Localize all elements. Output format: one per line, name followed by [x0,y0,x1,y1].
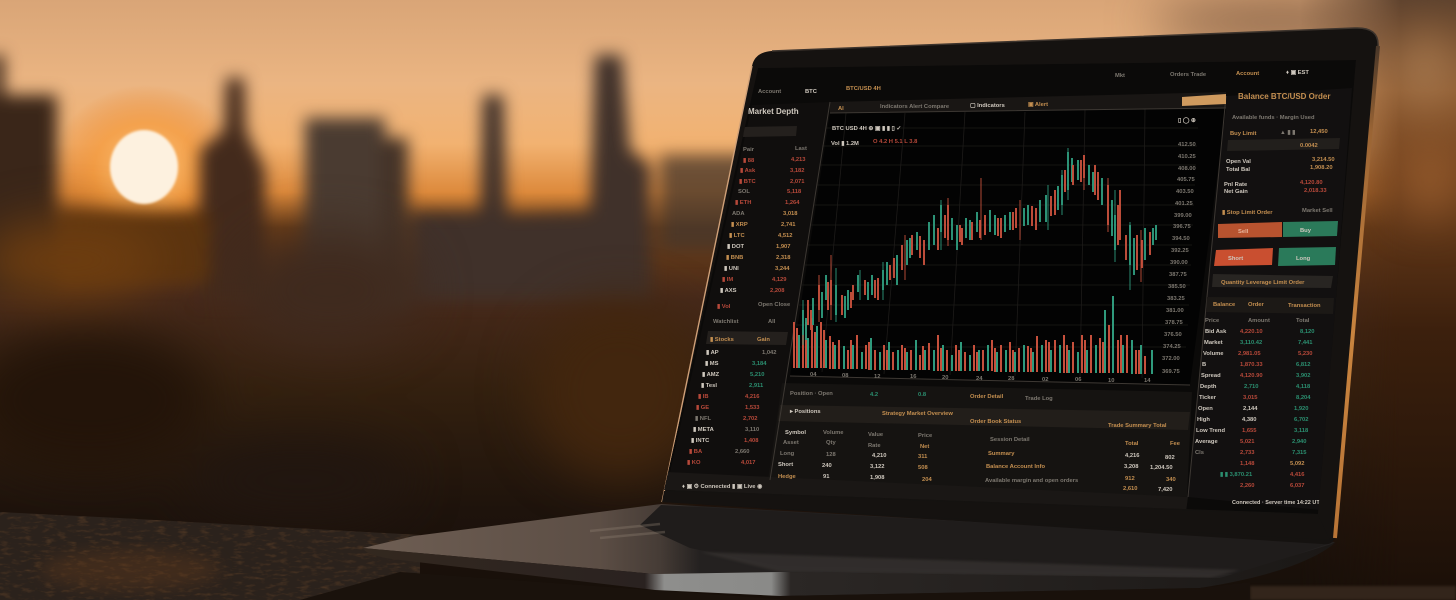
bottom table text: 2,610 [1123,486,1138,492]
left second list rows: 1,533 [745,405,760,411]
left watchlist rows: 3,018 [783,211,798,217]
y axis labels: 374.25 [1163,344,1182,350]
order book rows: 8,204 [1296,395,1311,401]
bottom table text: Net [920,444,929,450]
top bar text: ♦ ▣ EST [1286,70,1309,76]
right panel fields: 4,120.80 [1300,180,1323,186]
bottom table text: 91 [823,474,830,480]
left watchlist rows: 2,071 [790,179,805,185]
left watchlist rows: Last [795,146,807,152]
order book rows: 5,021 [1240,439,1255,445]
left watchlist rows: ▮ BNB [726,255,743,261]
left watchlist rows: 4,129 [772,277,787,283]
left panel heading: Market Depth [748,107,799,116]
left second list rows: Gain [757,337,770,343]
bottom toolbar text: ▸ Positions [789,409,821,415]
left second list rows [687,337,777,466]
order book rows: 1,920 [1294,406,1309,412]
left watchlist rows: Watchlist [713,319,739,325]
order book rows: 3,118 [1294,428,1309,434]
left watchlist rows: ▮ ETH [735,200,751,206]
left watchlist rows: ▮ UNI [724,266,739,272]
bottom table text: 340 [1166,477,1176,483]
order book rows: Amount [1248,318,1270,324]
orange action button [1182,94,1226,106]
chart: green candles [803,152,1156,340]
buy button small [1283,221,1338,237]
order book rows: 2,981.05 [1238,351,1261,357]
left second list rows: 2,702 [743,416,758,422]
chart toolbar text: Al [838,106,844,112]
chart toolbar text: BTC USD 4H ⊕ ▣ ▮ ▮ ▯ ✓ [832,126,901,132]
bottom table text: 7,420 [1158,487,1173,493]
bottom table text: Summary [988,451,1015,457]
order book rows: 4,220.10 [1240,329,1263,335]
order book rows: 1,655 [1242,428,1257,434]
order book header: Balance [1213,302,1236,308]
left watchlist rows: 1,907 [776,244,791,250]
order book rows: Average [1195,439,1218,445]
order input text: Quantity Leverage Limit Order [1221,280,1305,286]
chart: candle wicks [803,148,1141,345]
order book rows: 3,902 [1296,373,1311,379]
bottom table text: 3,208 [1124,464,1139,470]
left watchlist rows: All [768,319,776,325]
order book rows [1195,318,1324,506]
lid right edge highlight [1335,46,1378,538]
chart header bar [830,92,1226,113]
order book header: Order [1248,302,1265,308]
bottom table text: Price [918,433,933,439]
left watchlist rows: ▮ 88 [743,158,755,164]
x axis labels: 20 [942,375,948,381]
right panel fields: Net Gain [1224,189,1248,195]
sell button small [1218,222,1282,238]
left watchlist rows: ▮ BTC [739,179,757,185]
x axis labels: 10 [1108,378,1114,384]
y axis labels: 399.00 [1174,213,1192,219]
order book rows: 4,416 [1290,472,1305,478]
left watchlist rows: 3,182 [790,168,805,174]
chart toolbar text: ▯ ◯ ⊕ [1178,117,1196,124]
table lower shadow [300,572,790,600]
x axis labels: 04 [810,372,817,378]
bottom table text: 311 [918,454,928,460]
bottom table text: 1,908 [870,475,885,481]
background: tree highlights [1150,8,1456,216]
y axis labels: 410.25 [1178,154,1197,160]
bottom toolbar text: Order Book Status [970,419,1021,425]
order book rows: Low Trend [1196,428,1225,434]
keyboard front highlight [700,552,1240,578]
bottom table text: 508 [918,465,928,471]
left second list rows: ▮ Tesl [701,383,717,389]
bottom table text: 4,210 [872,453,887,459]
order book rows: Ticker [1199,395,1217,401]
bottom table text: 128 [826,452,836,458]
order book rows: 2,733 [1240,450,1255,456]
top bar text: BTC/USD 4H [846,86,881,92]
chart: red candles [808,155,1150,330]
order book rows: 1,870.33 [1240,362,1263,368]
buy button large [1278,247,1336,266]
bottom table text: 4,216 [1125,453,1140,459]
left watchlist rows [713,146,807,325]
x axis labels: 06 [1075,377,1082,383]
laptop lid [662,28,1378,544]
bottom panel [768,383,1192,497]
bottom panel strip [778,405,1190,430]
left watchlist rows: 2,318 [776,255,791,261]
background: sun glow [51,85,241,255]
bottom table text: Balance Account Info [986,464,1046,470]
x axis labels: 02 [1042,377,1048,383]
bottom table text: 912 [1125,476,1135,482]
left second list rows: ▮ KO [687,460,701,466]
left watchlist rows: 2,741 [781,222,796,228]
bottom table text: Volume [823,430,844,436]
right panel fields [1222,115,1340,216]
sell button large [1214,248,1273,266]
bottom toolbar text: Strategy Market Overview [882,411,953,417]
order book rows: 6,812 [1296,362,1311,368]
right panel fields: 3,214.50 [1312,157,1335,163]
order book rows: 7,315 [1292,450,1307,456]
chart toolbar text: O 4.2 H 5.1 L 3.8 [873,139,918,145]
left watchlist rows: 2,208 [770,288,785,294]
order book rows: ▮ ▮ 3,870.21 [1220,472,1253,478]
bottom table text: Short [778,462,793,468]
left second list rows: ▮ NFL [695,416,712,422]
bottom table text: Available margin and open orders [985,478,1078,484]
keyboard reflections [590,524,665,538]
order book rows: 3,110.42 [1240,340,1262,346]
order input bar [1212,274,1333,288]
order book rows: 2,144 [1243,406,1258,412]
right panel fields: 0.0042 [1300,143,1318,149]
left second list rows: ▮ BA [689,449,703,455]
order book rows: 2,710 [1244,384,1259,390]
bottom table text: Session Detail [990,437,1030,443]
left watchlist rows: 4,512 [778,233,793,239]
top bar text: Mkt [1115,73,1125,79]
top bar text: Account [1236,71,1259,77]
button labels: Sell [1238,229,1249,235]
right panel fields: Market Sell [1302,208,1333,214]
left second list rows: 3,110 [745,427,759,433]
left second list rows: 5,210 [750,372,765,378]
y axis labels: 403.50 [1176,189,1194,195]
order book rows: 6,037 [1290,483,1305,489]
right panel heading: Balance BTC/USD Order [1238,92,1330,101]
right panel fields: 12,450 [1310,129,1328,135]
right panel fields: 2,018.33 [1304,188,1327,194]
order book rows: 1,148 [1240,461,1255,467]
screen base [664,60,1356,514]
left second list rows: ▮ META [693,427,715,433]
lid top edge highlight [772,28,1378,51]
chart toolbar text: ▢ Indicators [970,103,1005,109]
x axis labels: 16 [910,374,917,380]
order book rows: 3,015 [1243,395,1258,401]
right panel fields: ▮ Stop Limit Order [1222,210,1273,216]
left watchlist rows: Open Close [758,302,791,308]
order book rows: Market [1204,340,1223,346]
left watchlist rows: 4,213 [791,157,806,163]
x axis labels: 14 [1144,378,1151,384]
bottom table text: Fee [1170,441,1181,447]
bottom table text: Qty [826,440,836,446]
right panel fields: 1,908.20 [1310,165,1333,171]
order book rows: 7,441 [1298,340,1313,346]
background: lower blurred bokeh shapes [0,220,710,520]
y axis labels: 390.00 [1170,260,1188,266]
chart toolbar text: ▣ Alert [1028,102,1048,108]
bottom toolbar text: Position · Open [790,391,833,397]
top bar text [758,70,1309,95]
grid lines [793,109,1198,378]
order book rows: Depth [1200,384,1217,390]
right panel fields: ▲ ▮ ▮ [1280,130,1295,136]
screen [664,60,1356,514]
left watchlist rows: 5,118 [787,189,802,195]
y axis labels: 394.50 [1172,236,1190,242]
order book rows: Open [1198,406,1213,412]
bottom toolbar text: 0.8 [918,392,927,398]
left second list rows: ▮ AP [706,350,719,356]
status bar text: ♦ ▣ ⚙ Connected ▮ ▣ Live ◉ [682,483,763,490]
x axis labels: 24 [976,376,983,382]
order book rows: Bid Ask [1205,329,1227,335]
order book rows: Volume [1203,351,1224,357]
left watchlist rows: ▮ AXS [720,288,737,294]
chart toolbar text [831,102,1196,147]
left second list rows: 2,911 [749,383,764,389]
laptop base deck [363,504,1335,578]
left second list rows: 1,408 [744,438,759,444]
keyboard shadow area [640,505,1333,574]
left second list rows: 3,184 [752,361,767,367]
left watchlist rows: ▮ LTC [729,233,745,239]
bottom toolbar text: 4.2 [870,392,878,398]
bottom toolbar text [789,391,1167,429]
order book rows: 8,120 [1300,329,1315,335]
left watchlist panel [670,102,830,480]
order book rows: Price [1205,318,1220,324]
panel dividers [770,96,1226,497]
order book header [1206,297,1334,314]
x axis labels: 28 [1008,376,1015,382]
y axis labels: 396.75 [1173,224,1192,230]
left second list rows: 4,216 [745,394,760,400]
table surface [0,505,430,600]
left watchlist rows: ▮ XRP [731,222,748,228]
bottom table text: Total [1125,441,1139,447]
y axis labels: 369.75 [1162,369,1181,375]
right panel fields: Available funds · Margin Used [1232,115,1315,121]
bezel bottom [662,491,1330,540]
bottom table text: Value [868,432,884,438]
bottom table text: 204 [922,477,932,483]
bottom table text: Hedge [778,474,796,480]
y axis labels: 408.00 [1178,166,1196,172]
order book rows: 6,702 [1294,417,1309,423]
y axis labels [1162,142,1197,375]
left second list rows: ▮ AMZ [702,372,720,378]
laptop front lip [363,543,1335,596]
foreground bottom shadow [780,582,1250,600]
button labels [1228,228,1312,262]
status bar [664,472,1188,512]
order book rows: High [1197,417,1210,423]
y axis labels: 392.25 [1171,248,1190,254]
order book rows: Cls [1195,450,1204,456]
left watchlist rows: 3,244 [775,266,790,272]
order book header: Transaction [1288,303,1321,309]
y axis labels: 372.00 [1162,356,1180,362]
left watchlist rows: ▮ IM [722,277,733,283]
chart toolbar text: Vol ▮ 1.2M [831,141,859,147]
bottom table text: 240 [822,463,832,469]
bottom table text: Rate [868,443,881,449]
bottom toolbar text: Trade Summary Total [1108,423,1167,429]
top bar text: Account [758,89,781,95]
lid left edge highlight [662,66,752,502]
laptop [363,28,1378,596]
top bar text: Orders Trade [1170,72,1207,78]
sun [110,130,178,204]
button labels: Long [1296,256,1311,262]
y axis labels: 381.00 [1166,308,1184,314]
left second list rows: 2,660 [735,449,750,455]
right panel fields: Total Bal [1226,167,1250,173]
order book rows: Spread [1201,373,1221,379]
y axis labels: 383.25 [1167,296,1186,302]
order book rows: 5,092 [1290,461,1305,467]
order book rows: 4,120.90 [1240,373,1263,379]
y axis labels: 378.75 [1165,320,1184,326]
x axis labels [810,372,1150,382]
bottom table text: 1,204.50 [1150,465,1173,471]
right trading panel [1188,88,1352,510]
left second list rows: ▮ MS [705,361,719,367]
left watchlist rows: ▮ Vol [717,304,731,310]
chart black area [790,108,1226,385]
bottom table text: 802 [1165,455,1175,461]
right panel fields: Pnl Rate [1224,182,1248,188]
button labels: Buy [1300,228,1312,234]
left second list rows: ▮ INTC [691,438,710,444]
y axis labels: 412.50 [1178,142,1196,148]
x axis labels: 12 [874,374,880,380]
bottom toolbar text: Trade Log [1025,396,1053,402]
left second list rows: 4,017 [741,460,756,466]
y axis labels: 385.50 [1168,284,1186,290]
bottom toolbar text: Order Detail [970,394,1004,400]
left panel search [743,126,797,137]
button labels: Short [1228,256,1243,262]
order book rows: 2,940 [1292,439,1307,445]
y axis labels: 405.75 [1177,177,1196,183]
bottom table text: 3,122 [870,464,885,470]
right panel fields: Open Val [1226,159,1251,165]
bottom table text: Long [780,451,795,457]
y axis labels: 376.50 [1164,332,1182,338]
left watchlist rows: ▮ Ask [740,168,756,174]
order book rows: 5,230 [1298,351,1313,357]
chart: volume bars [794,296,1152,374]
bottom table text: Symbol [785,430,806,436]
top bar text: BTC [805,89,818,95]
left second list header [706,331,788,345]
table behind laptop right [1250,586,1456,600]
order book rows: Connected · Server time 14:22 UTC [1232,500,1324,506]
order book rows: 4,118 [1296,384,1311,390]
order book rows: Total [1296,318,1310,324]
left watchlist rows: 1,264 [785,200,800,206]
order book rows: 2,260 [1240,483,1255,489]
chart toolbar text: Indicators Alert Compare [880,104,950,110]
left second list rows: ▮ IB [698,394,709,400]
left second list rows: 1,042 [762,350,777,356]
right panel fields: Buy Limit [1230,131,1256,137]
order book rows: B [1202,362,1206,368]
left watchlist rows: SOL [738,189,750,195]
background: blurred city skyline [0,55,750,308]
bottom table text: Asset [783,440,799,446]
order book rows: 4,380 [1242,417,1257,423]
y axis labels: 401.25 [1175,201,1194,207]
bottom table text [778,430,1181,493]
background: right side trees [1309,0,1456,350]
left second list rows: ▮ GE [696,405,709,411]
left watchlist rows: Pair [743,147,755,153]
y axis labels: 387.75 [1169,272,1188,278]
left watchlist rows: ADA [732,211,745,217]
x axis labels: 08 [842,373,849,379]
left watchlist rows: ▮ DOT [727,244,744,250]
left second list rows: ▮ Stocks [710,337,734,343]
